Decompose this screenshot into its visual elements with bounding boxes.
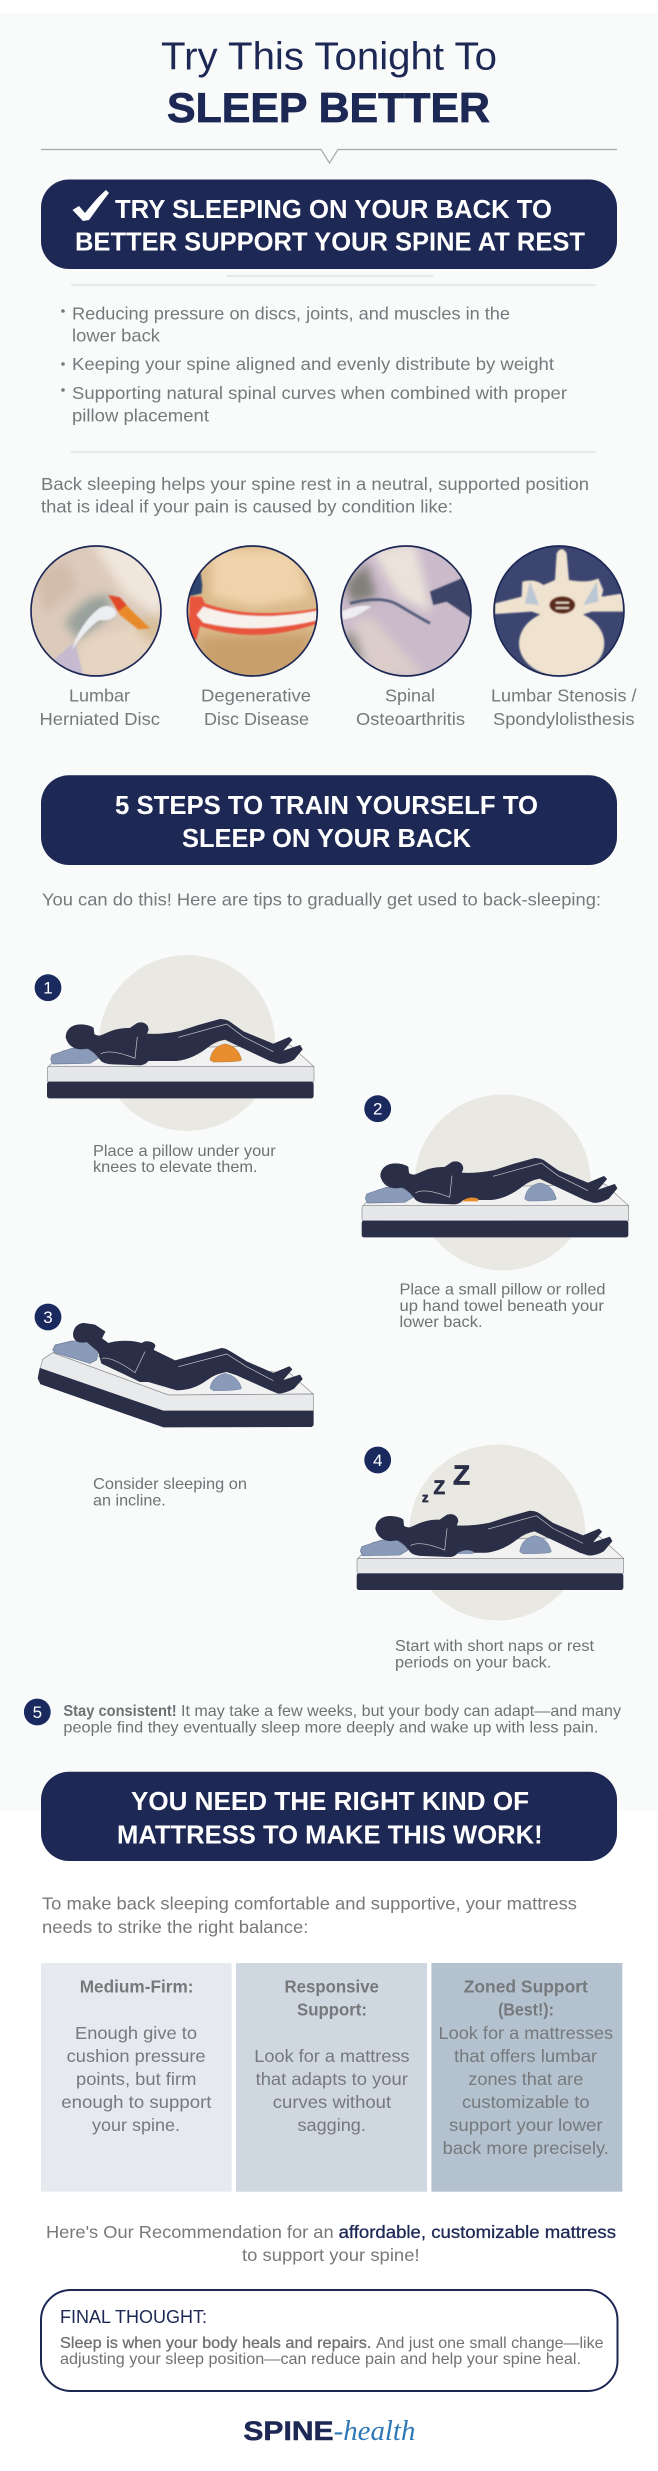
panel: medium-firm (41, 1963, 232, 2192)
title (161, 36, 497, 131)
logo: spine-health: SPINE (243, 2416, 334, 2446)
step 5 text (63, 1703, 621, 1737)
intro paragraph: back sleeping: Back sleeping helps your spine rest in a neutral, supported position (41, 474, 589, 494)
step 2 backdrop (415, 1094, 591, 1270)
bullet list: Supporting natural spinal curves when combined with proper (72, 383, 567, 403)
step 5 number: 5 (33, 1703, 42, 1722)
step 3 caption: Consider sleeping on (93, 1476, 247, 1493)
banner text: BETTER SUPPORT YOUR SPINE AT REST (75, 229, 585, 257)
mattress intro text: needs to strike the right balance: (42, 1917, 308, 1937)
panel: medium-firm: enough to support (61, 2092, 212, 2112)
banner text: TRY SLEEPING ON YOUR BACK TO (115, 196, 552, 224)
recommendation text: to support your spine! (242, 2245, 420, 2265)
panel: responsive support: sagging. (298, 2115, 366, 2135)
intro paragraph: back sleeping: that is ideal if your pain is caused by condition like: (41, 497, 453, 517)
condition labels: Lumbar Stenosis / (491, 686, 637, 706)
banner: right kind of mattress: YOU NEED THE RIGHT KIND OF (131, 1788, 529, 1816)
icon: zzz (422, 1460, 470, 1505)
image: lumbar stenosis / spondylolisthesis (493, 545, 625, 677)
banner: try sleeping on your back (41, 180, 617, 269)
panel: zoned support: back more precisely. (443, 2138, 609, 2158)
condition labels: Degenerative (201, 686, 311, 706)
panel: zoned support: Look for a mattresses (438, 2023, 613, 2043)
icon: zzz: z (422, 1490, 429, 1505)
logo: spine-health (243, 2415, 415, 2447)
condition labels: Herniated Disc (40, 709, 160, 729)
step 4 number (364, 1447, 391, 1473)
panel: zoned support: customizable to (462, 2092, 590, 2112)
mattress intro text (42, 1894, 577, 1937)
step 2 caption: up hand towel beneath your (400, 1298, 605, 1315)
step 2 illustration (362, 1158, 629, 1237)
step 3 number (35, 1304, 61, 1330)
step 5 (24, 1699, 621, 1737)
step 2 (362, 1094, 629, 1331)
bullet list: Reducing pressure on discs, joints, and muscles in the (72, 304, 510, 324)
step 3 illustration (38, 1323, 313, 1427)
panel: zoned support: (Best!): (498, 2000, 554, 2020)
panel: medium-firm: Medium-Firm: (80, 1977, 194, 1997)
condition labels: Disc Disease (204, 709, 309, 729)
intro text: tips: You can do this! Here are tips to gradually get used to back-sleeping: (42, 890, 601, 910)
banner: 5 steps (41, 775, 617, 865)
bullet list: pillow placement (72, 406, 209, 426)
step 4 backdrop (409, 1444, 585, 1620)
callout body: And just one small change—like (376, 2335, 604, 2352)
panel: zoned support: that offers lumbar (454, 2046, 597, 2066)
step 1 caption: knees to elevate them. (93, 1159, 258, 1176)
step 4 caption (395, 1638, 595, 1672)
step 1 caption: Place a pillow under your (93, 1143, 276, 1160)
bullet list: Keeping your spine aligned and evenly distribute by weight (72, 354, 554, 374)
banner: 5 steps: 5 STEPS TO TRAIN YOURSELF TO (115, 792, 538, 820)
step 1 number: 1 (43, 978, 53, 998)
title: SLEEP BETTER (167, 84, 490, 131)
callout body (60, 2335, 604, 2368)
condition labels: Lumbar (69, 686, 130, 706)
step 5 text: Stay consistent! (63, 1703, 177, 1720)
callout body: adjusting your sleep position—can reduce pain and help your spine heal. (60, 2351, 581, 2368)
banner text (75, 196, 585, 257)
step 3 (35, 1304, 313, 1510)
step 1 caption (93, 1143, 276, 1176)
panel: zoned support: Zoned Support (464, 1977, 588, 1997)
step 2 caption (400, 1281, 606, 1331)
condition labels: Spondylolisthesis (493, 709, 635, 729)
panel: zoned support: support your lower (449, 2115, 603, 2135)
step 5 text: people find they eventually sleep more deeply and wake up with less pain. (63, 1720, 598, 1737)
step 2 number (364, 1095, 391, 1122)
panel: responsive support: Support: (297, 2000, 367, 2020)
banner: 5 steps: SLEEP ON YOUR BACK (182, 825, 472, 853)
step 1 number (35, 974, 61, 1001)
condition labels (40, 686, 637, 729)
callout body: Sleep is when your body heals and repairs. (60, 2335, 371, 2352)
step 5 text: It may take a few weeks, but your body can adapt—and many (181, 1703, 621, 1720)
banner: right kind of mattress: MATTRESS TO MAKE THIS WORK! (117, 1821, 543, 1849)
step 2 caption: lower back. (400, 1314, 482, 1331)
step 4 number: 4 (373, 1451, 382, 1470)
panel: medium-firm: cushion pressure (67, 2046, 206, 2066)
step 1 (35, 955, 314, 1176)
page background (0, 13, 658, 1811)
mattress intro text: To make back sleeping comfortable and supportive, your mattress (42, 1894, 577, 1914)
panel: medium-firm: points, but firm (76, 2069, 196, 2089)
icon: zzz: Z (453, 1460, 470, 1490)
callout: final thought (41, 2290, 618, 2391)
panel: zoned support (431, 1963, 622, 2192)
image: degenerative disc disease (186, 545, 318, 677)
condition labels: Spinal (385, 686, 435, 706)
condition labels: Osteoarthritis (356, 709, 465, 729)
step 4 caption: periods on your back. (395, 1655, 551, 1672)
step 2 number: 2 (373, 1100, 382, 1118)
image: spinal osteoarthritis (340, 545, 472, 677)
step 1 illustration (47, 1019, 314, 1098)
step 3 caption (93, 1476, 247, 1510)
icon: check mark (72, 190, 109, 221)
title: Try This Tonight To (161, 36, 497, 78)
recommendation text: affordable, customizable mattress (339, 2222, 616, 2242)
panel: responsive support (236, 1963, 427, 2192)
panel: zoned support: zones that are (468, 2069, 583, 2089)
panel: responsive support: Look for a mattress (254, 2046, 410, 2066)
panel: medium-firm: your spine. (92, 2115, 180, 2135)
divider with notch (41, 150, 617, 163)
step 4 illustration (357, 1511, 624, 1590)
step 1 backdrop (99, 955, 275, 1131)
callout heading: FINAL THOUGHT: (60, 2307, 207, 2327)
condition images (25, 540, 628, 683)
banner: right kind of mattress (41, 1772, 617, 1861)
step 4 (357, 1444, 624, 1672)
panel: responsive support: that adapts to your (256, 2069, 408, 2089)
panel: responsive support: curves without (273, 2092, 391, 2112)
logo: spine-health: -health (334, 2415, 415, 2447)
step 3 caption: an incline. (93, 1493, 166, 1510)
image: lumbar herniated disc (30, 545, 162, 677)
panel: responsive support: Responsive (284, 1977, 379, 1997)
step 3 number: 3 (43, 1308, 53, 1327)
step 4 caption: Start with short naps or rest (395, 1638, 595, 1655)
icon: zzz: Z (434, 1478, 446, 1499)
panel: medium-firm: Enough give to (75, 2023, 197, 2043)
bullet list: lower back (72, 326, 160, 346)
recommendation text (46, 2222, 616, 2265)
bullet list (61, 304, 567, 426)
step 5 number (24, 1699, 51, 1725)
recommendation text: Here's Our Recommendation for an (46, 2222, 334, 2242)
intro paragraph: back sleeping (41, 474, 589, 517)
step 2 caption: Place a small pillow or rolled (400, 1281, 606, 1298)
